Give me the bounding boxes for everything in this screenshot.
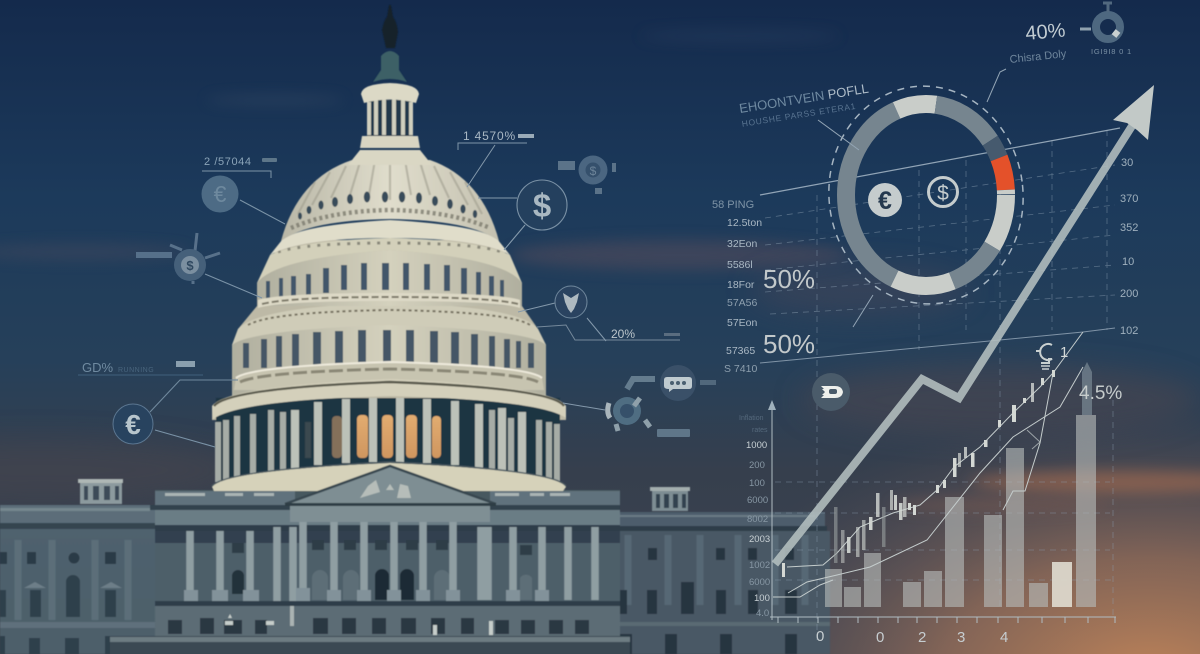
dome drum base bbox=[212, 398, 566, 491]
y axis labels: 8002 bbox=[747, 514, 768, 525]
y axis labels: 4.0 bbox=[756, 608, 769, 619]
y axis labels: 1002 bbox=[749, 560, 770, 571]
capitol building bbox=[0, 5, 830, 654]
left callouts bbox=[78, 156, 285, 447]
lower drum bbox=[212, 310, 566, 419]
right axis labels: 10 bbox=[1122, 256, 1134, 268]
y axis labels: rates bbox=[752, 427, 768, 434]
y axis labels: 100 bbox=[754, 593, 770, 604]
right axis labels bbox=[1120, 157, 1138, 337]
y axis labels: 200 bbox=[749, 460, 765, 471]
bar chart bbox=[825, 362, 1096, 607]
left axis labels and percentages: 57A56 bbox=[727, 297, 758, 309]
donut callouts: HOUSHE PARSS ETERA1 bbox=[741, 101, 857, 129]
rising arrow bbox=[775, 85, 1154, 564]
label: 1 4570% with dollar circle: 1 4570% bbox=[463, 129, 516, 143]
donut callouts: 40% bbox=[1025, 20, 1067, 45]
icon: D badge bbox=[812, 373, 850, 411]
donut chart bbox=[818, 76, 1034, 314]
x axis labels: 2 bbox=[918, 629, 926, 646]
left axis labels and percentages: 18For bbox=[727, 279, 755, 291]
icon: dollar gear top bbox=[558, 156, 616, 194]
left axis labels and percentages: 57365 bbox=[726, 345, 755, 357]
x axis labels: 0 bbox=[816, 628, 824, 645]
x axis labels: 3 bbox=[957, 629, 965, 646]
x axis labels: 0 bbox=[876, 629, 884, 646]
dome silhouette bbox=[212, 240, 566, 420]
left axis labels and percentages: 50% bbox=[763, 264, 815, 294]
right wing bbox=[605, 487, 830, 654]
icon: dollar coin bbox=[928, 178, 958, 206]
arched openings bbox=[312, 570, 532, 600]
dome windows bbox=[298, 192, 477, 220]
icon: lightbulb bbox=[1036, 344, 1068, 369]
label: GD% with euro outline: GD% bbox=[82, 360, 114, 375]
label: 1 4570% with dollar circle bbox=[458, 129, 567, 250]
x axis labels: 4 bbox=[1000, 629, 1008, 646]
upper drum and balustrade bbox=[232, 220, 546, 345]
y axis labels: 2003 bbox=[749, 534, 770, 545]
donut callouts: EHOONTVEIN POFLL bbox=[738, 81, 870, 116]
right-of-dome callouts bbox=[458, 129, 716, 437]
y axis labels: 1000 bbox=[746, 440, 767, 451]
left axis labels and percentages: 12.5ton bbox=[727, 217, 762, 229]
y axis labels: 100 bbox=[749, 478, 765, 489]
label: GD% with euro outline: € bbox=[125, 409, 141, 440]
right axis labels: 370 bbox=[1120, 193, 1138, 205]
grid lines bbox=[765, 130, 1115, 640]
icon: dollar coin: $ bbox=[937, 182, 949, 205]
central portico block bbox=[110, 490, 630, 654]
icon: emblem circle with 20%: 20% bbox=[611, 327, 635, 341]
right axis labels: 102 bbox=[1120, 325, 1138, 337]
financial overlay bbox=[712, 3, 1154, 646]
donut callouts: Chisra Doly bbox=[1009, 48, 1067, 66]
line series bbox=[773, 332, 1083, 597]
y axis labels: 6000 bbox=[747, 495, 768, 506]
y axis labels: Inflation bbox=[739, 415, 764, 422]
pediment bbox=[285, 466, 496, 522]
label: 4.5%: 4.5% bbox=[1079, 383, 1122, 404]
trend guide lines bbox=[760, 128, 1120, 363]
icon: euro coin bbox=[868, 183, 902, 217]
y axis labels bbox=[739, 415, 770, 619]
left wing bbox=[0, 479, 156, 654]
label: GD% with euro outline bbox=[78, 360, 238, 447]
x axis labels bbox=[816, 628, 1008, 646]
icon: dollar gear top: $ bbox=[590, 164, 597, 178]
right axis labels: 352 bbox=[1120, 222, 1138, 234]
left axis labels and percentages: 32Eon bbox=[727, 238, 758, 250]
right axis labels: 200 bbox=[1120, 288, 1138, 300]
y axis labels: 6000 bbox=[749, 577, 770, 588]
lantern and statue bbox=[348, 5, 432, 165]
donut callouts bbox=[738, 3, 1132, 327]
icon: lightbulb: 1 bbox=[1060, 344, 1068, 361]
icon: dollar gear left: $ bbox=[186, 258, 194, 273]
left axis labels and percentages: 58 PING bbox=[712, 199, 754, 211]
dome shell bbox=[281, 160, 499, 241]
left axis labels and percentages: 50% bbox=[763, 329, 815, 359]
icon: emblem circle with 20% bbox=[518, 286, 680, 341]
candlesticks bbox=[782, 370, 1055, 577]
icon: dollar gear left bbox=[136, 233, 262, 298]
label: 2 /57044 with euro disc: 2 /57044 bbox=[204, 156, 252, 168]
donut callouts: IGI9I8 0 1 bbox=[1091, 47, 1132, 56]
left axis labels and percentages: 57Eon bbox=[727, 317, 758, 329]
icon: gear and chat cluster bbox=[563, 365, 716, 437]
chart axes bbox=[768, 400, 1116, 623]
label: 2 /57044 with euro disc bbox=[202, 156, 285, 224]
lit windows bbox=[305, 415, 441, 458]
left axis labels and percentages: S 7410 bbox=[724, 363, 757, 375]
label: GD% with euro outline: RUNNING bbox=[118, 367, 154, 374]
left axis labels and percentages: 5586l bbox=[727, 259, 753, 271]
left axis labels and percentages bbox=[712, 199, 815, 375]
icon: euro coin: € bbox=[878, 187, 892, 215]
label: 1 4570% with dollar circle: $ bbox=[533, 187, 551, 224]
right axis labels: 30 bbox=[1121, 157, 1133, 169]
label: 2 /57044 with euro disc: € bbox=[214, 181, 227, 207]
